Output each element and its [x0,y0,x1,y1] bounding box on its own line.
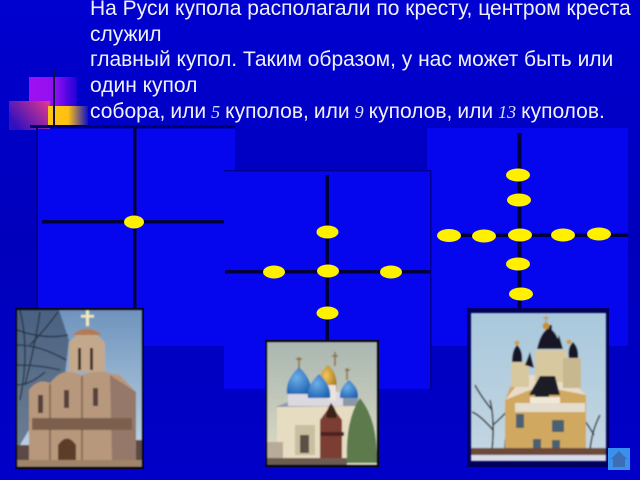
panel: one dome plan [30,125,235,346]
text block: description: главный купол. Таким образом, у нас может быть или [90,48,613,71]
domes: cross arms [437,168,611,300]
photo: white-stone cathedral [15,308,144,469]
dome: centre [124,216,144,228]
text block: description [90,0,631,123]
photo: blue-domed cathedral [265,340,379,467]
text block: description: служил [90,23,162,46]
icon: home button [608,448,630,470]
decorative colour squares [9,70,88,130]
photo: black-domed yellow cathedral [467,308,609,467]
text block: description: собора, или 5 куполов, или 9 куполов, или 13 куполов. [90,100,605,123]
text block: description: один купол [90,74,197,97]
panel: five dome plan [224,170,432,389]
panel: thirteen dome plan [427,128,628,346]
domes: cross arms [263,226,402,320]
